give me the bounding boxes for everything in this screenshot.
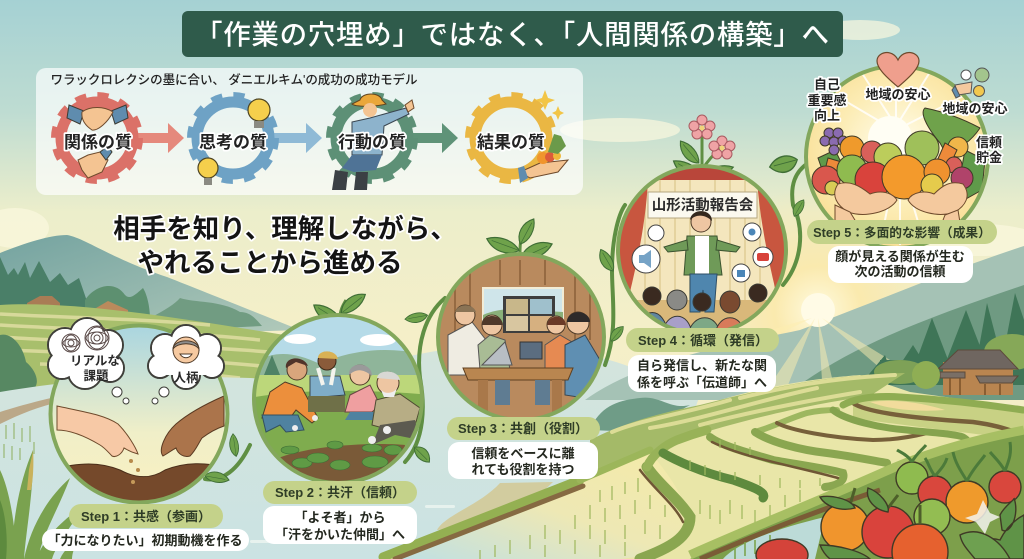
gear: quality of action with farmer: 行動の質 — [338, 133, 406, 152]
background: left houses — [27, 296, 128, 320]
step 4 label — [626, 328, 779, 352]
step 5 label: Step 5：多面的な影響（成果） — [813, 225, 991, 240]
background: left mountains — [0, 235, 300, 340]
background: left rice shoots — [4, 423, 34, 460]
step 3: co-creation — [435, 216, 610, 479]
thought cloud: real issues: 課題 — [83, 369, 109, 383]
step 2 description: 「よそ者」から — [294, 510, 386, 525]
background: lake — [0, 345, 700, 559]
step 2 label: Step 2：共汗（信頼） — [275, 485, 405, 500]
background: brown bank left — [0, 396, 60, 424]
thought cloud: personality: 人柄 — [173, 370, 199, 385]
background: sun rays — [735, 318, 890, 390]
gear: quality of thinking: 思考の質 — [199, 133, 267, 152]
label: trust savings: 貯金 — [976, 150, 1002, 165]
background: sun — [801, 293, 835, 327]
background: shoreline — [437, 482, 553, 530]
background: forest — [860, 293, 1024, 385]
background: sun glow — [693, 185, 943, 435]
step 3 description: れても役割を持つ — [472, 462, 574, 477]
step 3 description — [448, 442, 598, 479]
step 4 description: 自ら発信し、新たな関 — [637, 358, 767, 373]
rice terraces — [383, 373, 1024, 559]
step 5: multifaceted impact — [805, 53, 1008, 283]
vines connecting steps — [205, 163, 808, 479]
step 3 label — [447, 417, 600, 440]
step 5 label — [807, 220, 997, 244]
step 5 description: 次の活動の信頼 — [854, 264, 946, 279]
icon: people network — [952, 68, 989, 98]
label: regional peace of mind: 地域の安心 — [865, 87, 931, 102]
gear: quality of results: 結果の質 — [477, 133, 545, 152]
label: trust savings — [976, 135, 1002, 165]
label: self-esteem — [807, 77, 847, 123]
main heading: 相手を知り、理解しながら、 — [113, 214, 457, 244]
step 2 description — [263, 506, 417, 544]
arrow: relation to thinking — [138, 123, 184, 153]
main heading: やれることから進める — [138, 248, 402, 278]
label: self-esteem: 自己 — [814, 77, 840, 92]
panel: success cycle model — [36, 68, 583, 195]
gear: quality of relationship: 関係の質 — [64, 133, 132, 152]
background: right mountains — [585, 246, 1024, 432]
step 4: circulation — [615, 115, 790, 392]
fruits — [756, 442, 1024, 559]
sprout step 2 — [310, 289, 369, 335]
fruit bank — [690, 430, 1024, 559]
step 4 circle illustration: 山形活動報告会 — [652, 196, 754, 214]
background: left terraces — [0, 304, 285, 400]
gear: quality of results — [468, 90, 568, 183]
label: trust savings: 信頼 — [976, 135, 1002, 150]
step 1 description — [42, 529, 249, 551]
step 1 circle illustration — [50, 325, 230, 505]
step 4 description — [628, 355, 776, 392]
step 4 description: 係を呼ぶ「伝道師」へ — [637, 375, 767, 390]
gear: quality of action with farmer — [329, 94, 415, 190]
step 5 circle illustration — [805, 65, 990, 250]
step 5 description — [828, 246, 973, 283]
main heading — [113, 214, 457, 278]
gear: quality of relationship — [54, 95, 140, 181]
label: regional peace of mind second: 地域の安心 — [942, 101, 1008, 116]
step 3 circle illustration — [435, 250, 610, 425]
thought cloud: real issues: リアルな — [70, 354, 120, 368]
step 4 circle illustration — [615, 165, 790, 335]
step 2 description: 「汗をかいた仲間」へ — [275, 527, 405, 542]
house — [912, 350, 1018, 395]
vine leaves — [204, 153, 807, 484]
step 1 label: Step 1：共感（参画） — [81, 509, 211, 524]
title: 「作業の穴埋め」ではなく、「人間関係の構築」へ — [195, 19, 829, 50]
icon: heart handshake — [877, 53, 919, 87]
step 2: shared sweat — [250, 289, 430, 544]
step 5 description: 顔が見える関係が生む — [835, 249, 965, 264]
step 1: empathy — [42, 318, 249, 551]
step 1 description: 「力になりたい」初期動機を作る — [47, 533, 243, 548]
thought cloud: real issues — [48, 318, 129, 404]
step 2 circle illustration — [250, 314, 430, 485]
panel caption: ワラックロレクシの墨に合い、 ダニエルキム'の成功の成功モデル — [50, 72, 418, 87]
background: water glints — [250, 505, 455, 543]
label: self-esteem: 重要感 — [807, 93, 847, 108]
label: self-esteem: 向上 — [814, 108, 840, 123]
step 2 label — [263, 481, 417, 504]
step 3 description: 信頼をベースに離 — [471, 446, 575, 461]
title — [182, 11, 843, 57]
step 3 label: Step 3：共創（役割） — [458, 421, 588, 436]
flower sprout step 4 — [670, 115, 735, 184]
watermark star — [965, 500, 1000, 534]
arrow: action to result — [410, 123, 458, 153]
gear: quality of thinking — [190, 95, 276, 185]
arrow: thinking to action — [274, 123, 322, 153]
step 4 label: Step 4：循環（発信） — [638, 333, 768, 348]
left foreground grass — [0, 450, 85, 559]
sprout step 3 — [484, 216, 554, 275]
background: clouds — [0, 20, 1024, 256]
thought cloud: personality — [148, 325, 224, 404]
step 1 label — [69, 504, 223, 528]
